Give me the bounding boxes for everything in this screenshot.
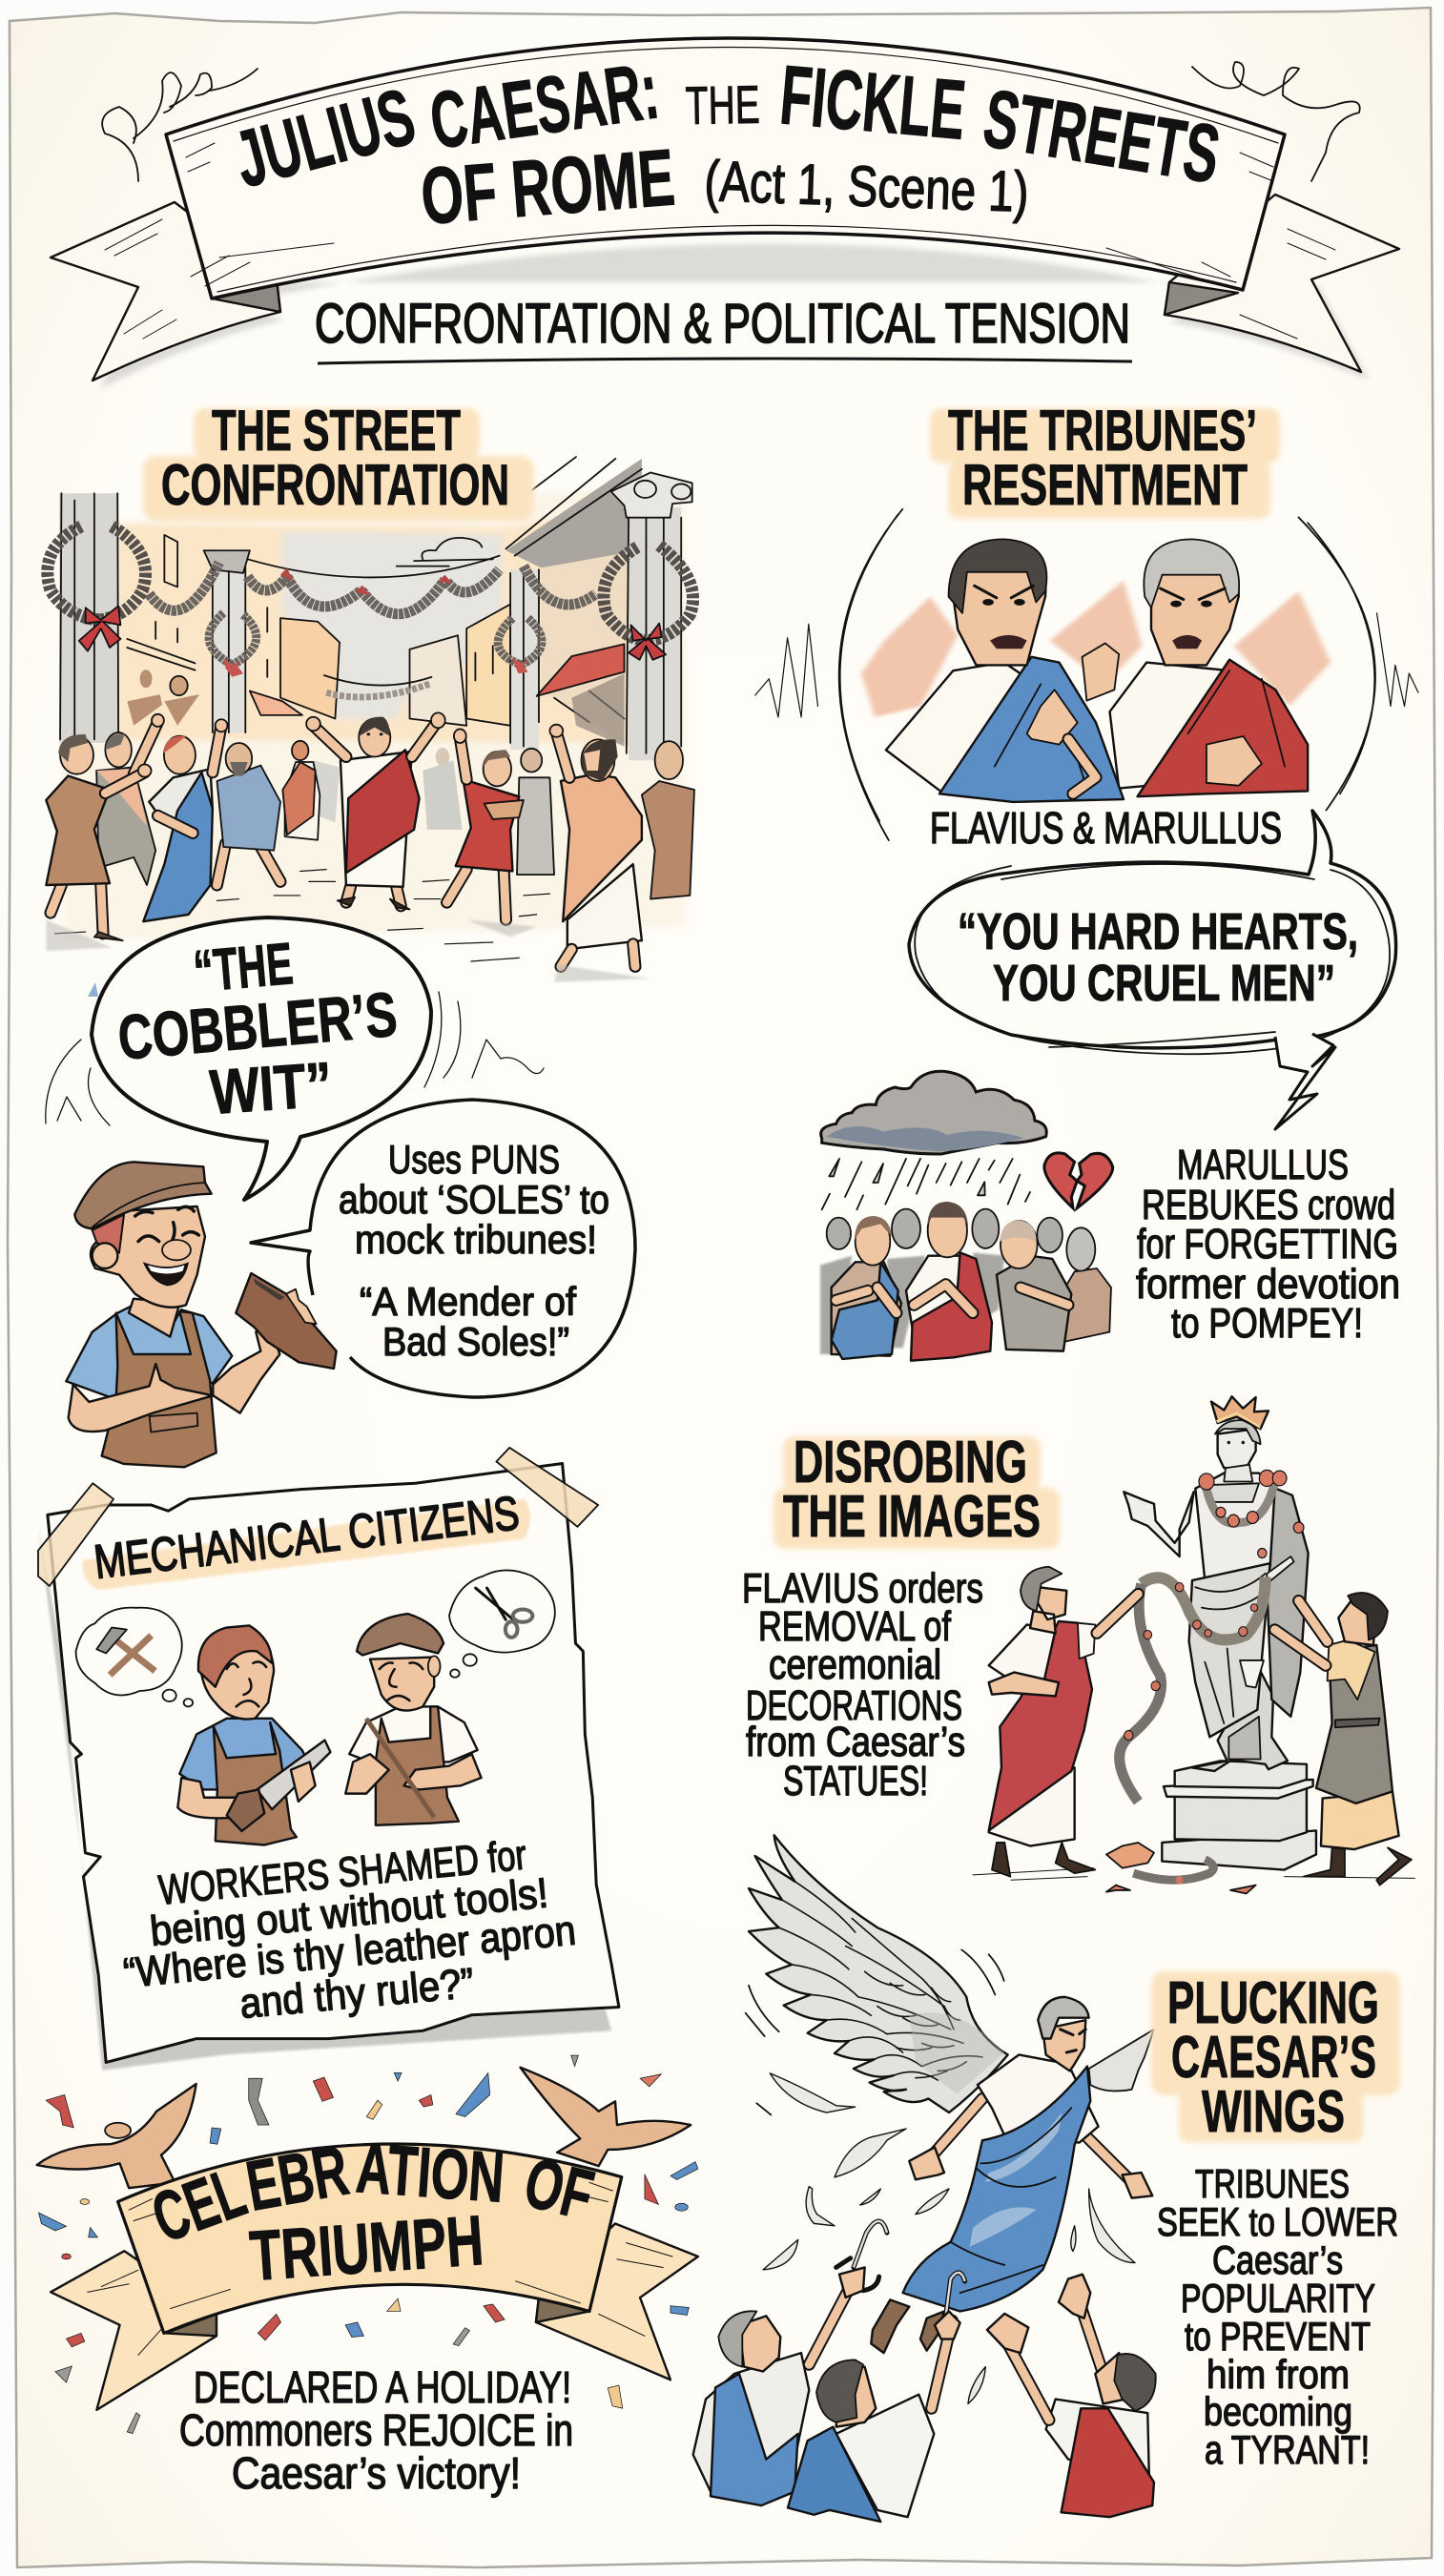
speech bubble: puns about soles	[251, 1100, 635, 1397]
banner title text: OF	[517, 2142, 601, 2235]
text: flavius orders removal: FLAVIUS orders	[742, 1565, 983, 1612]
left tail	[51, 2251, 217, 2410]
confetti	[39, 2055, 698, 2434]
speech bubble: the cobbler's wit	[46, 917, 544, 1200]
heading: plucking caesar's wings	[1167, 1970, 1379, 2145]
banner title text: ATION	[354, 2128, 506, 2217]
tape	[38, 1483, 113, 1586]
blue drape man	[149, 769, 213, 823]
speech bubble: you hard hearts	[909, 811, 1396, 1129]
heading: disrobing the images: DISROBING	[794, 1430, 1027, 1495]
text: marullus rebukes	[1136, 1142, 1400, 1347]
banner title text: CEL	[142, 2152, 256, 2257]
fallen crown and wreath	[1106, 1843, 1154, 1868]
statue legs	[1192, 1662, 1288, 1771]
poster shadow	[38, 1529, 611, 2071]
main title banner	[51, 38, 1399, 389]
title line 1: JULIUS	[225, 71, 423, 204]
banner title text: EBR	[240, 2131, 354, 2226]
ground	[973, 1868, 1414, 1880]
broken heart	[1044, 1153, 1077, 1208]
pedestal	[1162, 1830, 1316, 1870]
main title banner: CAESAR:	[424, 45, 664, 166]
garlands	[149, 563, 596, 614]
banner central panel	[166, 38, 1285, 299]
ground cobbles	[55, 870, 549, 961]
wreaths	[48, 526, 693, 641]
text: flavius orders removal: from Caesar’s	[746, 1719, 965, 1765]
text: tribunes seek to lower: him from	[1207, 2352, 1350, 2397]
banner title text: TRIUMPH	[247, 2200, 486, 2296]
text: puns	[339, 1137, 609, 1364]
folds	[166, 2298, 589, 2336]
banner title text	[142, 2128, 601, 2296]
right tribune	[1046, 2400, 1149, 2483]
banner right tail	[1165, 195, 1399, 372]
swoosh arcs	[839, 509, 1375, 840]
text: tribunes seek to lower	[1157, 2161, 1398, 2472]
central caesar figure	[346, 887, 401, 906]
bubble quote text	[958, 903, 1358, 1012]
heading: the street confrontation	[161, 399, 509, 517]
crown	[1211, 1396, 1269, 1429]
rain	[822, 1159, 1030, 1209]
raised hands	[138, 712, 563, 777]
background bust figures	[127, 694, 199, 726]
illustration: rain cloud over sad crowd	[820, 1071, 1113, 1361]
left eagle	[37, 2084, 196, 2188]
neck	[129, 1299, 179, 1337]
head	[1042, 2020, 1085, 2071]
text: flavius orders removal: REMOVAL of	[758, 1603, 952, 1650]
text: declared a holiday: Commoners REJOICE in	[179, 2405, 573, 2455]
heading: the tribunes' resentment: THE TRIBUNES’	[948, 399, 1257, 463]
apron	[102, 1311, 217, 1467]
heading: the street confrontation: THE STREET	[212, 399, 461, 463]
crowd behind	[423, 760, 463, 830]
motion lines	[746, 1949, 1004, 2114]
poster sheet	[48, 1464, 619, 2062]
text: puns: about ‘SOLES’ to	[339, 1177, 609, 1222]
statue lower drape	[1189, 1563, 1270, 1737]
heading: mechanical citizens: MECHANICAL CITIZENS	[92, 1486, 522, 1589]
red bows	[79, 606, 120, 651]
brown tunic man	[51, 885, 61, 913]
title line 2: OF ROME	[418, 132, 678, 241]
statue torso	[1195, 1473, 1275, 1580]
text: marullus rebukes: MARULLUS	[1177, 1142, 1349, 1188]
caption: flavius and marullus: FLAVIUS & MARULLUS	[930, 803, 1282, 853]
arms	[69, 1364, 213, 1432]
background faces	[827, 1209, 1062, 1252]
arms	[932, 2099, 982, 2156]
text: tribunes seek to lower: becoming	[1204, 2389, 1352, 2434]
cap	[74, 1162, 212, 1228]
text: workers shamed: and thy rule?”	[237, 1960, 476, 2028]
worker right	[349, 1706, 478, 1762]
middle tribune	[836, 2395, 934, 2517]
small toga figure	[285, 762, 320, 840]
heading: the street confrontation: CONFRONTATION	[161, 453, 509, 517]
text: tribunes seek to lower: Caesar’s	[1212, 2237, 1343, 2282]
text: declared a holiday	[179, 2362, 573, 2498]
tunic	[978, 2054, 1099, 2143]
raised fist	[1083, 643, 1119, 701]
grey peach figure	[96, 767, 155, 885]
bubble quote text: YOU CRUEL MEN”	[993, 955, 1335, 1012]
banner left tail	[51, 202, 280, 381]
text: puns: “A Mender of	[360, 1279, 576, 1324]
text: puns: Bad Soles!”	[382, 1319, 569, 1364]
text: puns: mock tribunes!	[355, 1217, 597, 1262]
pulled garland	[1142, 1577, 1266, 1639]
text: flavius orders removal	[742, 1565, 983, 1804]
subtitle: CONFRONTATION & POLITICAL TENSION	[315, 293, 1130, 355]
top corner scroll flourishes	[102, 69, 258, 181]
statue head	[1218, 1429, 1256, 1468]
banner folds	[212, 279, 280, 312]
center red figure	[906, 1256, 980, 1348]
text: marullus rebukes: former devotion	[1136, 1261, 1400, 1308]
right bearded man	[567, 864, 642, 949]
rope	[248, 556, 500, 577]
shoe	[236, 1273, 337, 1369]
bubble title text: WIT”	[208, 1048, 335, 1127]
columns	[59, 493, 118, 743]
sandals	[871, 2299, 909, 2353]
heading highlight: disrobing	[774, 1436, 1060, 1549]
red tunic man	[447, 870, 506, 919]
heading highlight	[83, 1499, 530, 1590]
illustration: disrobing the statue	[973, 1396, 1414, 1894]
text: tribunes seek to lower: a TYRANT!	[1205, 2427, 1370, 2472]
bubble title text: “THE	[191, 931, 296, 1005]
heading: the tribunes' resentment: RESENTMENT	[962, 453, 1248, 517]
statue arm	[1124, 1492, 1194, 1556]
left blue figure	[832, 1262, 901, 1356]
thought bubble scissors	[449, 1570, 555, 1653]
illustration: plucking caesar's wings	[693, 1835, 1156, 2522]
subtitle underline	[318, 359, 1132, 363]
heading highlight: plucking	[1151, 1971, 1400, 2142]
panel: celebration of triumph banner	[37, 2055, 698, 2434]
heading: plucking caesar's wings: WINGS	[1202, 2079, 1345, 2145]
text: workers shamed: “Where is thy leather apron	[121, 1907, 578, 1997]
left tribune	[693, 2353, 809, 2492]
banner shadow	[100, 243, 1369, 389]
heading: disrobing the images	[783, 1430, 1041, 1550]
saw	[257, 1741, 330, 1809]
awnings	[537, 644, 625, 696]
heading highlight: tribunes resentment	[930, 408, 1280, 519]
pointing hand	[1027, 690, 1078, 745]
heading: the tribunes' resentment	[948, 399, 1257, 517]
small wing	[1089, 2030, 1154, 2091]
face	[135, 1206, 198, 1251]
blue robe bearded man	[217, 843, 226, 885]
wing scallops	[865, 1971, 966, 2078]
man with red toga	[1110, 663, 1262, 789]
worker right	[1304, 1847, 1412, 1886]
text: flavius orders removal: DECORATIONS	[746, 1682, 962, 1729]
central panel	[118, 2144, 622, 2333]
heading: disrobing the images: THE IMAGES	[783, 1484, 1041, 1550]
peach hatching	[861, 580, 1331, 717]
large wing	[749, 1835, 1008, 2112]
illustration: angry tribunes	[755, 509, 1418, 840]
cloud	[397, 538, 493, 567]
man with blue toga	[886, 663, 1041, 793]
right tail	[536, 2224, 698, 2380]
lightning tail	[1275, 1034, 1335, 1129]
text: tribunes seek to lower: TRIBUNES	[1195, 2161, 1350, 2206]
bubble title text: COBBLER’S	[115, 979, 400, 1073]
blue robe	[903, 2067, 1090, 2311]
text: declared a holiday: Caesar’s victory!	[232, 2448, 521, 2498]
panel: street confrontation illustration	[46, 457, 694, 982]
rain cloud	[821, 1071, 1046, 1154]
worker left	[179, 1719, 310, 1789]
illustration: laughing cobbler	[66, 1162, 337, 1467]
text: workers shamed: being out without tools!	[148, 1869, 550, 1955]
rose garland on chest	[1205, 1482, 1275, 1523]
text: marullus rebukes: to POMPEY!	[1171, 1300, 1363, 1347]
bubble title text	[115, 931, 400, 1127]
right eagle	[521, 2068, 691, 2166]
text: flavius orders removal: STATUES!	[783, 1758, 928, 1804]
motion lines	[46, 992, 544, 1125]
text: flavius orders removal: ceremonial	[769, 1641, 941, 1688]
text: tribunes seek to lower: to PREVENT	[1185, 2314, 1371, 2359]
main title banner: STREETS	[978, 72, 1226, 201]
heading highlight: street confrontation	[143, 408, 534, 521]
main title banner: THE	[685, 74, 760, 135]
head	[91, 1206, 205, 1308]
statue back drape	[1259, 1482, 1309, 1717]
text: workers shamed: WORKERS SHAMED for	[156, 1831, 528, 1914]
shirt	[66, 1305, 232, 1399]
text: puns: Uses PUNS	[388, 1137, 560, 1182]
text: workers shamed	[121, 1831, 578, 2028]
main title banner: (Act 1, Scene 1)	[704, 149, 1030, 224]
panel: mechanical citizens poster	[38, 1448, 619, 2071]
text: tribunes seek to lower: POPULARITY	[1181, 2276, 1375, 2320]
hooks	[836, 2221, 887, 2291]
right far figure	[642, 781, 694, 899]
far right figure	[1065, 1268, 1111, 1342]
flavius	[1056, 1843, 1095, 1873]
text: declared a holiday: DECLARED A HOLIDAY!	[194, 2362, 571, 2412]
thought bubble hammer	[76, 1608, 182, 1696]
main title banner: FICKLE	[776, 47, 969, 157]
right gray figure	[997, 1256, 1071, 1351]
floating feathers	[763, 2073, 1135, 2403]
